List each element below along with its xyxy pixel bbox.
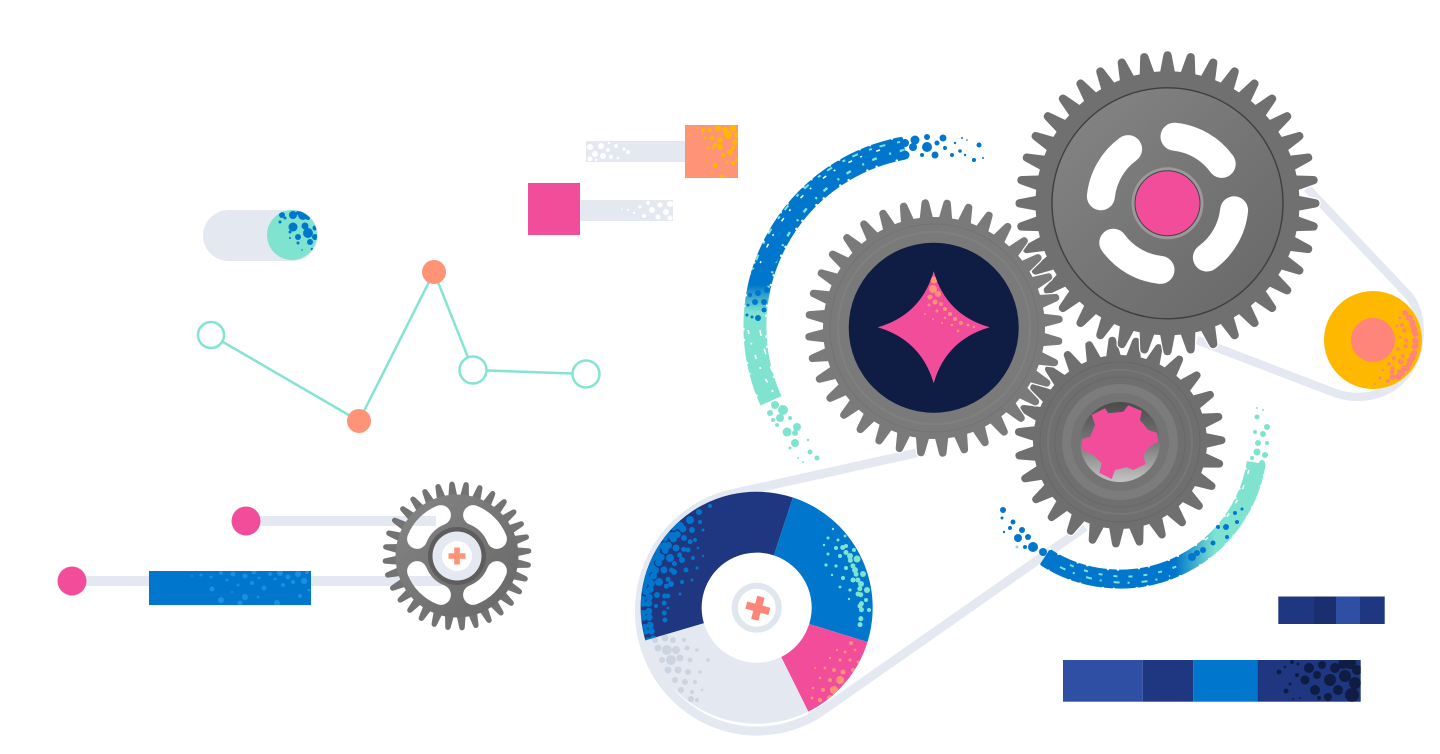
toggle knob — [267, 210, 318, 260]
open marker — [198, 322, 224, 348]
coral marker — [347, 409, 371, 433]
pink star — [878, 271, 990, 383]
navy badge — [849, 243, 1019, 413]
segment: navy — [641, 492, 793, 645]
center ring — [735, 586, 779, 630]
lower gear — [1000, 321, 1238, 557]
pink splined core — [1082, 405, 1158, 479]
large gear — [992, 28, 1343, 379]
window slots — [1101, 137, 1234, 270]
teal and blue arc, left — [743, 134, 984, 463]
lower left slider — [58, 566, 442, 606]
segment: pink — [781, 624, 868, 712]
upper left slider — [232, 506, 436, 536]
coral marker — [422, 260, 446, 284]
short stacked bar — [1278, 596, 1385, 624]
pink handle — [232, 506, 260, 536]
coral square with yellow speckle — [685, 124, 740, 180]
long stacked bar — [1063, 657, 1362, 702]
plus icon — [448, 548, 466, 564]
toggle pill — [203, 210, 318, 261]
coral center — [1351, 318, 1395, 362]
yellow pulley — [1324, 291, 1422, 389]
central gear with star badge — [805, 199, 1063, 457]
hub — [428, 527, 486, 585]
lower gear hub — [1062, 384, 1178, 500]
segment: blue — [774, 498, 873, 642]
bar with coral square — [586, 124, 740, 180]
open marker — [460, 356, 486, 384]
small gear — [382, 482, 532, 630]
segment: grey — [645, 623, 808, 724]
donut chart pulley — [641, 492, 873, 724]
blue bar — [149, 570, 311, 606]
open marker — [572, 360, 600, 388]
plus icon — [743, 594, 772, 623]
pink square — [528, 183, 580, 235]
line chart — [198, 260, 600, 433]
teal and blue arc, lower right — [1000, 407, 1270, 589]
belt: donut pulley to gears — [639, 451, 1085, 731]
hub ring — [1132, 167, 1204, 239]
navy speckle — [1276, 657, 1362, 702]
bar with pink square — [528, 183, 673, 235]
ring groove — [1052, 88, 1283, 319]
pink hub core — [1135, 171, 1200, 236]
pink handle — [58, 566, 86, 596]
belt: large gear to yellow pulley — [1197, 188, 1420, 397]
